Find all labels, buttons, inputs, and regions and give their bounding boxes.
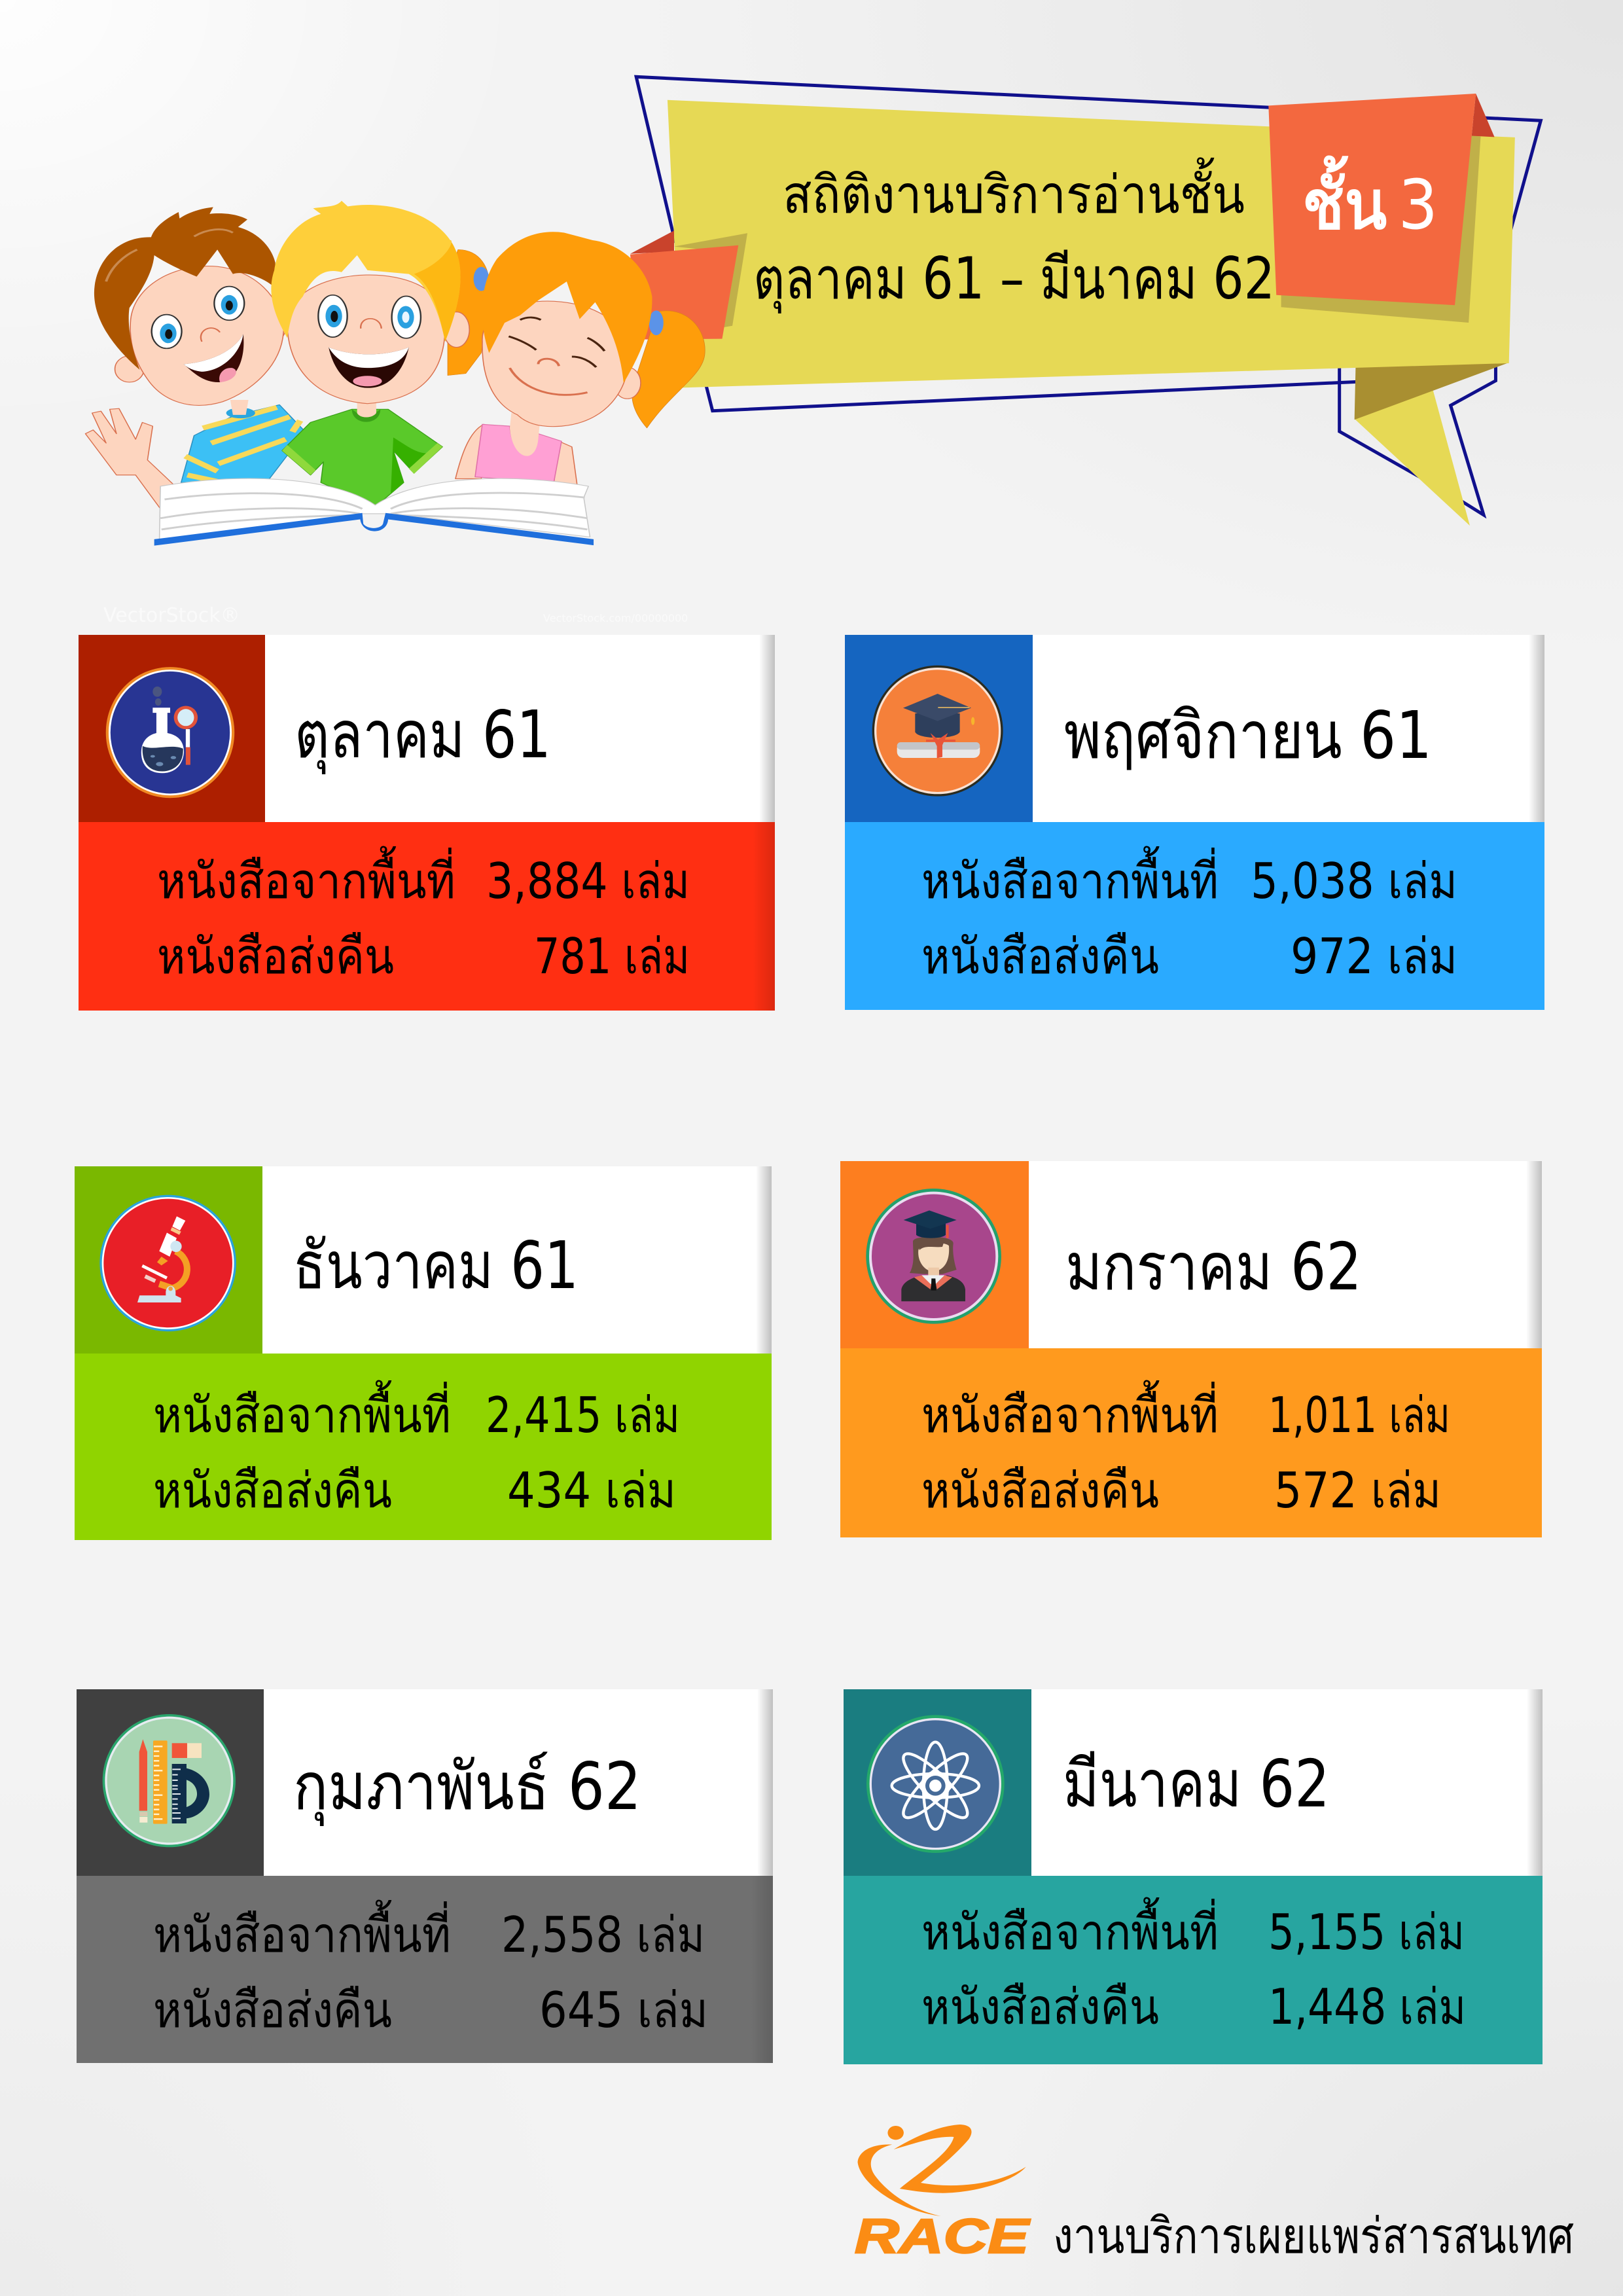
boy hair — [94, 207, 276, 370]
banner title line 1: สถิติงานบริการอ่านชั้น — [783, 157, 1245, 225]
stats: 1,448 เล่ม — [1268, 1978, 1466, 2036]
floor label: ชั้น 3 — [1302, 156, 1438, 245]
banner outline — [636, 77, 1541, 515]
illustration: three children reading a book — [85, 201, 705, 546]
boy hair highlights — [106, 230, 233, 281]
card header white — [845, 635, 1544, 822]
month title: พฤศจิกายน 61 — [1064, 697, 1432, 774]
blond boy nose — [361, 319, 382, 329]
girl arms and top — [455, 424, 577, 484]
stats: หนังสือจากพื้นที่ — [157, 846, 455, 910]
card: December 61 — [75, 1166, 772, 1540]
card: March 62 — [844, 1689, 1543, 2064]
card colour block — [77, 1689, 264, 1876]
stats: 3,884 เล่ม — [486, 852, 690, 910]
card: October 61 — [79, 635, 775, 1011]
striped shirt — [181, 404, 306, 482]
card colour block — [840, 1161, 1029, 1348]
card colour block — [75, 1166, 262, 1354]
stats: 645 เล่ม — [539, 1981, 708, 2039]
stats: หนังสือส่งคืน — [921, 1462, 1159, 1519]
watermark remnants — [103, 604, 688, 627]
boy eyes — [152, 287, 244, 348]
card header white — [840, 1161, 1542, 1348]
watermark remnants: VectorStock® — [103, 604, 240, 627]
yellow ribbon — [668, 100, 1515, 387]
stats: 5,155 เล่ม — [1268, 1903, 1465, 1961]
right flag — [1268, 94, 1495, 323]
stats: หนังสือส่งคืน — [921, 927, 1159, 985]
girl hair — [482, 232, 652, 383]
icon: microscope — [99, 1195, 236, 1331]
stats — [153, 1380, 680, 1519]
card header white — [77, 1689, 773, 1876]
stats: หนังสือส่งคืน — [153, 1462, 392, 1519]
month title: ตุลาคม 61 — [294, 696, 551, 775]
open book — [154, 478, 594, 546]
girl closed eyes and smile — [508, 317, 605, 395]
stats — [921, 1380, 1450, 1519]
girl right ponytail — [632, 310, 705, 428]
card body — [77, 1876, 773, 2063]
logo mark — [858, 2125, 1026, 2216]
stats: หนังสือส่งคืน — [157, 927, 394, 985]
card body — [840, 1348, 1542, 1537]
card: January 62 — [840, 1161, 1542, 1537]
stats: 1,011 เล่ม — [1268, 1386, 1450, 1444]
card colour block — [845, 635, 1033, 822]
stats: หนังสือจากพื้นที่ — [153, 1380, 451, 1444]
blond boy eyes — [318, 295, 421, 338]
stats: หนังสือจากพื้นที่ — [921, 1897, 1219, 1961]
blond boy hair — [271, 201, 461, 342]
banner title line 2: ตุลาคม 61 – มีนาคม 62 — [753, 245, 1275, 314]
girl face and ear — [482, 301, 641, 427]
stats: 434 เล่ม — [507, 1462, 676, 1519]
icon: female graduate — [866, 1189, 1001, 1324]
blond boy face and ear — [287, 275, 469, 404]
boy neck — [230, 400, 249, 415]
green shirt — [282, 409, 442, 507]
card colour block — [79, 635, 265, 822]
blond hair shade — [414, 240, 461, 342]
card: November 61 — [845, 635, 1544, 1010]
blond boy mouth — [329, 348, 409, 388]
logo wordmark: RACE — [855, 2209, 1031, 2263]
stats: 5,038 เล่ม — [1251, 852, 1457, 910]
ribbon tail — [1355, 363, 1509, 526]
stats: หนังสือจากพื้นที่ — [921, 1380, 1219, 1444]
month title: มีนาคม 62 — [1063, 1746, 1330, 1822]
watermark remnants: VectorStock.com/00000000 — [543, 612, 688, 624]
stats — [153, 1899, 708, 2039]
month title: ธันวาคม 61 — [293, 1227, 579, 1304]
stats: 781 เล่ม — [534, 927, 690, 985]
card body — [79, 822, 775, 1011]
card body — [75, 1354, 772, 1540]
stats — [921, 1897, 1466, 2036]
stats: 2,415 เล่ม — [486, 1386, 680, 1444]
logo: RACE — [855, 2125, 1031, 2263]
card header white — [844, 1689, 1543, 1876]
icon: atom — [866, 1715, 1005, 1853]
boy mouth — [184, 334, 243, 382]
stats: 572 เล่ม — [1274, 1462, 1441, 1519]
stats — [157, 846, 690, 985]
boy nose — [201, 328, 220, 342]
card header white — [75, 1166, 772, 1354]
card body — [844, 1876, 1543, 2064]
stats: หนังสือส่งคืน — [153, 1981, 392, 2039]
left flag — [630, 230, 747, 340]
girl neck — [510, 413, 541, 456]
card: February 62 — [77, 1689, 773, 2063]
stats: 972 เล่ม — [1291, 927, 1457, 985]
icon: ruler, pencil and protractor — [103, 1714, 236, 1847]
card body — [845, 822, 1544, 1010]
card colour block — [844, 1689, 1031, 1876]
boy face and ears — [115, 266, 286, 405]
stats: หนังสือจากพื้นที่ — [153, 1899, 451, 1964]
stats: หนังสือส่งคืน — [921, 1978, 1159, 2036]
card header white — [79, 635, 775, 822]
girl back ponytail — [448, 249, 490, 376]
stats — [921, 846, 1457, 985]
blond boy neck — [357, 400, 376, 417]
waving hand and arm — [85, 408, 173, 509]
title banner — [630, 77, 1541, 526]
icon: graduation cap and diploma — [872, 666, 1003, 797]
month title: กุมภาพันธ์ 62 — [293, 1748, 641, 1827]
stats: หนังสือจากพื้นที่ — [921, 846, 1219, 910]
icon: flask and magnifier — [106, 667, 234, 798]
stats: 2,558 เล่ม — [501, 1906, 705, 1964]
month title: มกราคม 62 — [1065, 1229, 1362, 1305]
